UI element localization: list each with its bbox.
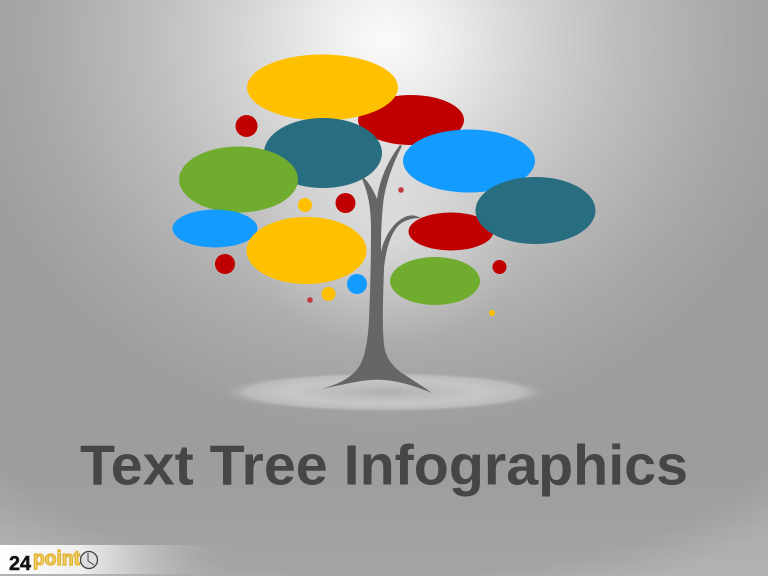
dot: red lower left: [215, 254, 235, 274]
dot: yellow lower: [322, 287, 336, 301]
ellipse: red top: [358, 95, 464, 145]
dot: blue lower: [347, 274, 367, 294]
footer strip: [0, 545, 230, 574]
icon: clock: [80, 552, 98, 568]
ellipse: yellow top: [247, 54, 398, 120]
dot: tiny red lower: [307, 297, 313, 303]
tree trunk and branches: [322, 145, 432, 393]
dot: red upper left: [236, 115, 258, 137]
logo number: 24: [9, 553, 32, 575]
ellipse: green left: [179, 146, 298, 212]
ellipse: teal right: [476, 177, 596, 244]
dot: red centre: [336, 193, 356, 213]
ellipse: teal upper: [264, 118, 382, 188]
ellipse: red right: [408, 212, 494, 250]
title: Text Tree Infographics: [80, 434, 688, 498]
ellipse: green lower: [390, 257, 480, 305]
dot: red right: [492, 260, 506, 274]
dot: tiny yellow right: [489, 310, 495, 316]
ellipse: blue left: [172, 210, 258, 248]
dot: yellow small: [298, 198, 312, 212]
ellipse: yellow lower: [246, 217, 366, 284]
dot: tiny red centre: [398, 187, 404, 193]
ground shadow: [222, 372, 548, 412]
logo: 24point: [9, 548, 98, 575]
ellipse: blue upper right: [403, 130, 535, 192]
logo word: point: [33, 548, 80, 570]
